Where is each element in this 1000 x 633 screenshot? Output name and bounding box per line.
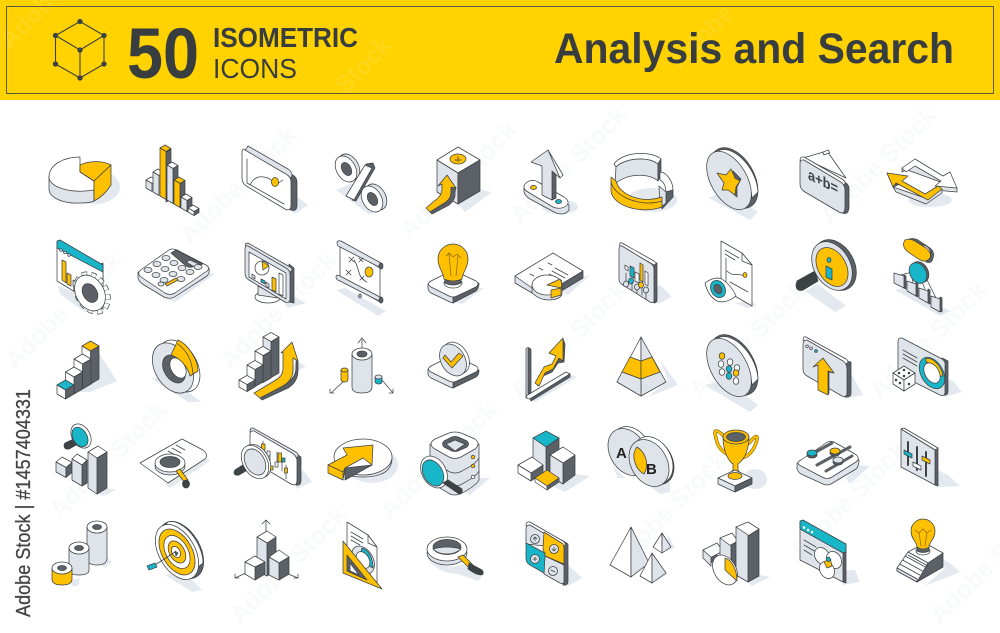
icon: stairs chart: [57, 341, 117, 399]
icon: stairs with arrow: [239, 332, 306, 400]
icon: check badge on plate: [428, 337, 479, 388]
icon: dots disc: [697, 326, 768, 412]
icon: swap arrows: [887, 159, 957, 207]
icon: pie chart: [49, 157, 120, 204]
watermark pattern: Adobe Stock: [174, 121, 302, 249]
icon: panel with dice: [893, 338, 962, 397]
icon: donut chart: [144, 333, 209, 402]
icon: window with up arrow: [803, 337, 863, 398]
icon: pyramid: [617, 337, 678, 397]
icon: cylinder with axes: [330, 338, 393, 393]
watermark pattern: Adobe Stock: [224, 501, 352, 629]
watermark pattern: Adobe Stock: [814, 101, 942, 229]
icon: bulb on stairs: [897, 519, 960, 586]
icon: document with pie: [515, 253, 590, 300]
icon: hierarchy diagram: [894, 238, 950, 316]
icon: cubes: [518, 431, 590, 492]
watermark pattern: Adobe Stock: [604, 446, 732, 574]
watermark pattern: Adobe Stock: [504, 276, 632, 404]
icon: circular arrows: [611, 153, 677, 212]
icon: database and magnifier: [415, 432, 490, 495]
icon: document with triangle ruler: [343, 522, 382, 589]
icon: window with gear: [57, 240, 114, 317]
icon: venn diagram A B: B: [646, 461, 657, 478]
icon: venn diagram A B: [600, 419, 682, 494]
icon: info magnifier: [796, 232, 865, 312]
watermark pattern: Adobe Stock: [504, 101, 632, 229]
icon: percent: [331, 150, 391, 216]
watermark pattern: Adobe Stock: [374, 396, 502, 524]
icon: window with venn: [800, 520, 860, 585]
header banner: [0, 0, 1000, 100]
icon: slider plate: [797, 441, 870, 485]
icon: a+b board: a+b=: [808, 167, 838, 198]
icon: histogram: [146, 145, 199, 216]
header banner: Stock: [329, 31, 397, 99]
icon: boxes with axes: [235, 520, 298, 580]
watermark pattern: Adobe Stock: [0, 246, 127, 374]
icon: target with arrow: [146, 514, 213, 592]
watermark pattern: Adobe Stock: [44, 396, 172, 524]
heading: 50: 50: [127, 15, 199, 94]
icon: bars with pie: [703, 522, 770, 589]
watermark pattern: Adobe Stock: [684, 276, 812, 404]
icon: sliders chart panel: [619, 243, 672, 304]
icon: bulb on plate: [428, 244, 484, 304]
title: Analysis and Search: [554, 25, 954, 73]
icon: magnifying glass: [427, 537, 483, 581]
icon: puzzle: [526, 522, 582, 586]
icon: up arrow on base: [524, 150, 578, 214]
icon: trophy: [715, 430, 767, 492]
heading: isometric: ISOMETRIC: [213, 22, 358, 53]
watermark pattern: Adobe Stock: [394, 116, 522, 244]
icon: pyramids: [610, 527, 675, 583]
stock id caption: Adobe Stock | #1457404331: [12, 389, 35, 617]
icon: document and magnifier: [140, 439, 210, 488]
icon: chart panel: [242, 146, 308, 214]
icon: wireframe cube: [53, 19, 106, 80]
watermark pattern: Adobe Stock: [784, 436, 912, 564]
icon: monitor dashboard: [245, 243, 306, 308]
icon: document with eye: [705, 241, 756, 308]
icon: mixer panel: [901, 428, 960, 487]
icon: candlestick panel with magnifier: [234, 428, 312, 489]
icon: star disc: [697, 139, 768, 220]
icon: three cylinders: [52, 521, 112, 586]
watermark pattern: Adobe Stock: [214, 246, 342, 374]
watermark pattern: Adobe Stock: [864, 276, 992, 404]
icon: box with rising arrow: [426, 147, 492, 214]
heading: icons: ICONS: [213, 53, 297, 84]
icon: pie with big arrow: [328, 439, 398, 483]
header banner: Adobe: [664, 0, 739, 74]
icon: a+b board: [800, 150, 850, 215]
icon: line graph arrow: [526, 338, 577, 402]
icon: presentation screen: [336, 241, 386, 316]
icon: magnifier over bars: [56, 420, 116, 496]
icon: calculator: [138, 249, 215, 302]
icon: venn diagram A B: A: [616, 445, 627, 462]
